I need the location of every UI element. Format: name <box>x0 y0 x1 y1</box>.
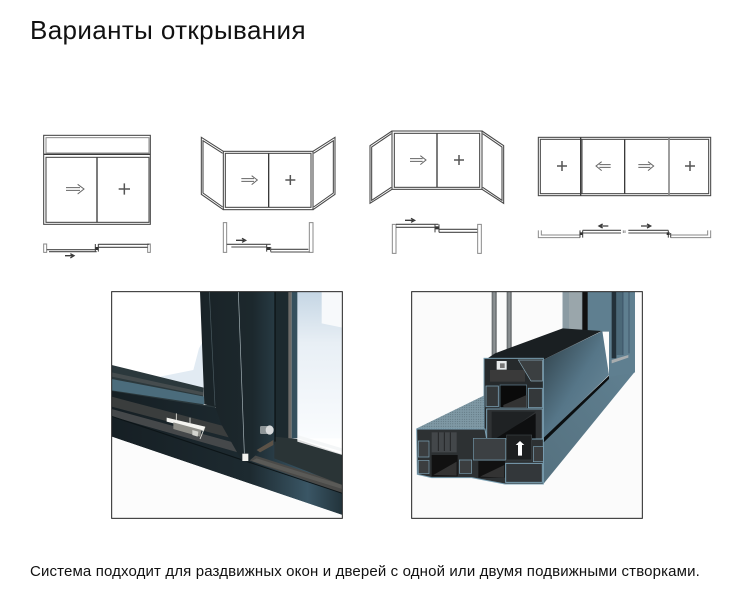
top dark sealing strip <box>485 328 602 360</box>
left glass reflection <box>160 340 204 388</box>
title: Варианты открывания <box>30 15 306 45</box>
schematics: options 1 and 2 <box>43 134 336 258</box>
upper outer face <box>543 331 609 439</box>
photo frame <box>112 292 342 518</box>
photo frame <box>412 292 642 518</box>
lower outer face <box>542 372 634 484</box>
shadow gap between faces <box>542 376 609 442</box>
lower cross-section <box>417 429 543 484</box>
diagram: window with two side wings <box>201 137 335 210</box>
plan: window with two side wings <box>223 223 313 252</box>
upper cross-section <box>484 358 543 440</box>
right glass <box>297 292 342 458</box>
glass panes <box>492 292 512 362</box>
perforated threshold <box>417 395 485 429</box>
plan: window with transom <box>44 244 150 258</box>
white corner cap <box>242 454 248 461</box>
diagram: four-panel window with centre opening <box>538 137 711 196</box>
diagram: window with transom <box>44 135 150 224</box>
plan: window with wings opening forward <box>392 218 481 253</box>
base rail <box>112 391 342 515</box>
diagram: window with wings opening forward <box>370 131 504 203</box>
roller peg <box>260 425 274 435</box>
photo: sliding sash corner with latch <box>111 291 343 519</box>
right sash profile <box>252 292 342 489</box>
photo: sliding system profile cross-section <box>411 291 643 519</box>
upper rail of the fixed sash <box>112 365 215 412</box>
schematics: options 3 and 4 <box>369 130 712 254</box>
caption: Система подходит для раздвижных окон и дверей с одной или двумя подвижными створками. <box>30 563 700 580</box>
latch hardware <box>167 413 205 439</box>
bottom white floor <box>112 437 342 518</box>
vertical sash stile <box>200 292 275 462</box>
plan: four-panel window with centre opening <box>538 224 711 238</box>
upper frame right part <box>563 292 635 382</box>
